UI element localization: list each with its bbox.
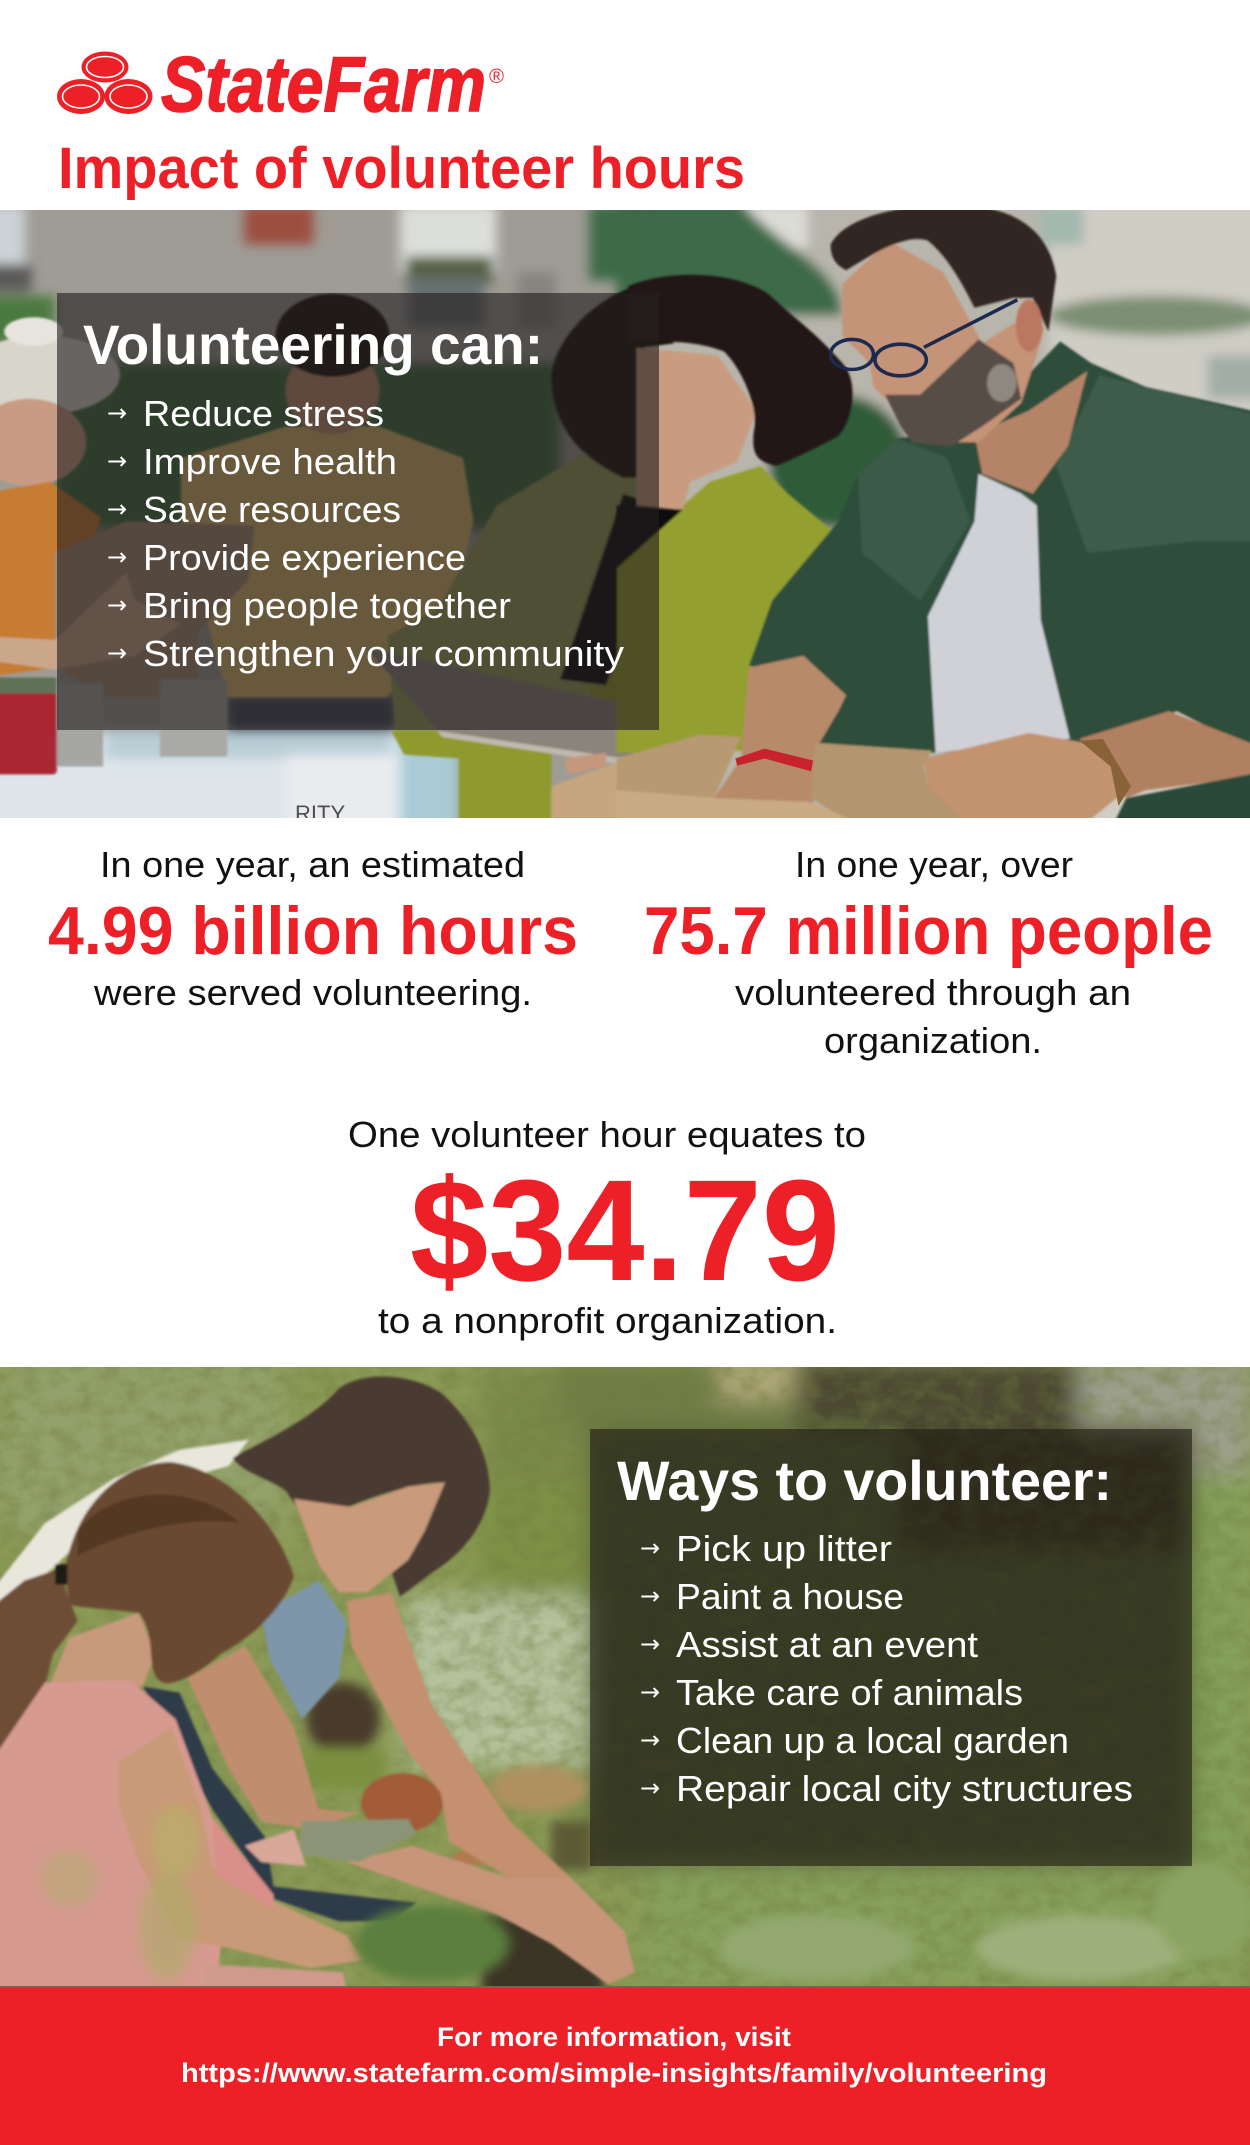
clipboard [366,648,638,761]
girl arm [118,1727,363,1968]
ear [1016,300,1042,352]
panel background [57,293,659,730]
panel: ways to volunteer [590,1429,1192,1866]
footer band [0,1986,1250,2145]
list: ways: Take care of animals [676,1672,1023,1713]
background of right half [617,189,1250,838]
heading: Ways to volunteer: [617,1449,1112,1512]
list: benefits: → [107,447,127,475]
list: ways: Repair local city structures [676,1768,1133,1809]
woman hair [628,275,852,466]
stat: value of one hour: to a nonprofit organization. [378,1300,837,1341]
wooden bracelet [1080,739,1131,806]
stat: people volunteering: organization. [824,1020,1042,1061]
t-shirt [928,474,1070,753]
neck [975,371,1087,494]
arm [714,656,846,808]
glasses [831,300,1017,376]
dark jeans [143,1687,416,1921]
stat: people volunteering: In one year, over [795,844,1073,885]
red bracelet [735,749,813,771]
list: benefits: Bring people together [143,585,511,626]
list: benefits: Improve health [143,441,397,482]
list: ways: → [640,1630,660,1658]
list: ways: → [640,1678,660,1706]
list: benefits: Reduce stress [143,393,384,434]
man face [842,241,1045,442]
box label text: RITY [295,801,345,826]
stat: people volunteering [644,844,1213,1061]
list: ways: Assist at an event [676,1624,978,1665]
white shirt [0,1440,249,1621]
young man [181,426,474,697]
list: ways: → [640,1582,660,1610]
cans [57,683,103,766]
stat: people volunteering: volunteered through an [735,972,1131,1013]
list: benefits: → [107,639,127,667]
list: benefits: → [107,495,127,523]
heading: Volunteering can: [83,313,543,376]
list: benefits: Provide experience [143,537,466,578]
stat: hours served: In one year, an estimated [100,844,525,885]
woman hair [233,1376,490,1597]
list: benefits: → [107,543,127,571]
man hair [831,205,1056,332]
girl neck [49,1613,155,1687]
footer text: For more information, visit [437,2022,791,2052]
right half of photo [617,205,1250,838]
stat: people volunteering: 75.7 million people [644,893,1213,969]
woman shirt [617,466,850,753]
older woman [0,335,120,415]
list: benefits: Save resources [143,489,401,530]
list: ways: Paint a house [676,1576,904,1617]
woman face [294,1482,445,1593]
girl hair [65,1462,294,1683]
pot [361,1773,443,1832]
left half of photo [0,205,673,838]
far arm [347,1593,571,1903]
registered mark: ® [489,66,504,88]
foreground plants [41,1805,1250,1982]
icon: three ovals emblem [57,52,152,114]
logo wordmark: StateFarm [161,40,486,128]
stat: hours served [48,844,578,1013]
stat: value of one hour [348,1114,866,1341]
ponytail [0,1568,78,1801]
bundle and arm [55,521,255,697]
list: ways: → [640,1534,660,1562]
panel: volunteering can [57,293,659,730]
list: ways [640,1528,1133,1809]
list: benefits: → [107,399,127,427]
footer text [181,2022,1047,2088]
list: ways: Clean up a local garden [676,1720,1069,1761]
beard [885,339,1021,446]
right forearm [1080,711,1250,798]
stat: hours served: 4.99 billion hours [48,893,578,969]
title: Impact of volunteer hours [58,136,745,201]
dress [0,1680,273,2013]
hand [924,732,1117,818]
panel background [590,1429,1192,1866]
list: benefits [107,393,624,674]
stat: value of one hour: $34.79 [410,1150,840,1311]
near arm [188,1646,359,1829]
stat: value of one hour: One volunteer hour equates to [348,1114,866,1155]
list: ways: → [640,1774,660,1802]
woman sleeve and shirt [387,450,673,735]
logo: State Farm [57,40,504,128]
woman face [636,347,757,509]
trowel [298,1819,416,1862]
box [617,735,741,798]
jeans blue [261,1580,347,1719]
jar [0,689,57,774]
list: benefits: Strengthen your community [143,633,624,674]
man shirt [749,341,1250,759]
photo: mother and child gardening [0,1360,1250,2013]
list: benefits: → [107,591,127,619]
stat: hours served: were served volunteering. [93,972,532,1013]
list: ways: Pick up litter [676,1528,892,1569]
photo: volunteers sorting donations [0,189,1250,838]
list: ways: → [640,1726,660,1754]
footer text: https://www.statefarm.com/simple-insights/family/volunteering [181,2058,1047,2088]
